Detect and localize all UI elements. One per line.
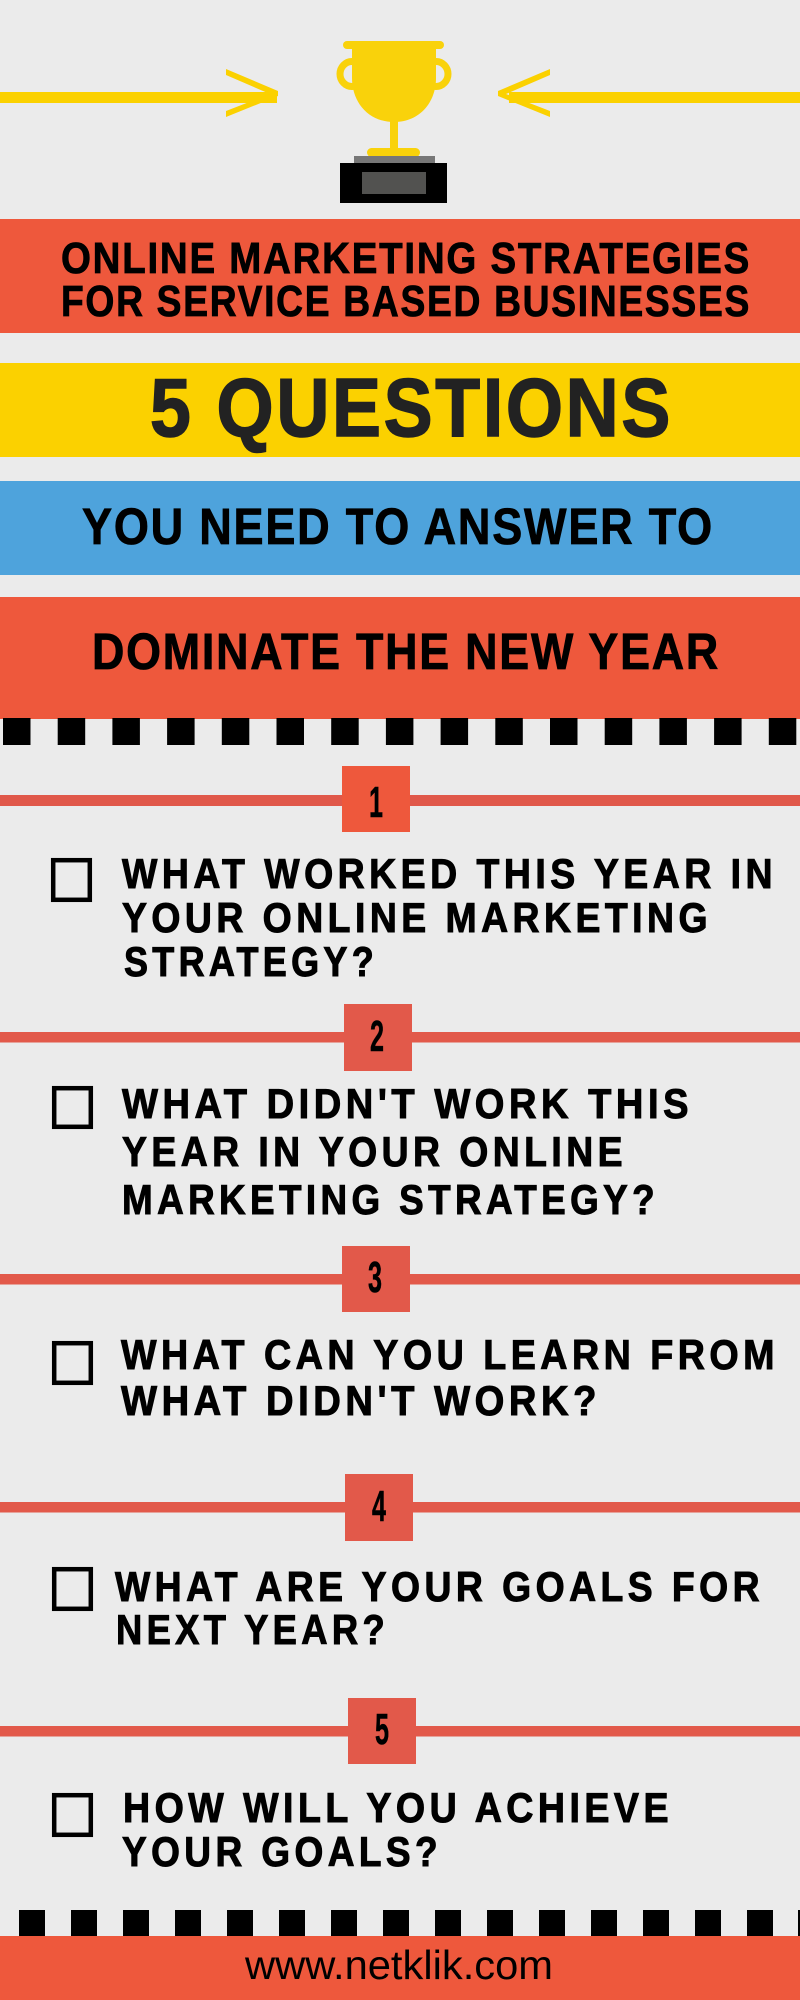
checkbox 1 <box>53 860 90 900</box>
question 3 text: WHAT DIDN'T WORK? <box>121 1377 601 1424</box>
question 1 <box>0 766 800 985</box>
checkbox 4 <box>54 1569 91 1609</box>
number badge 2 <box>344 1004 412 1071</box>
number badge 1: 1 <box>369 778 383 827</box>
question 4 text <box>115 1563 764 1653</box>
question 5 text: HOW WILL YOU ACHIEVE <box>123 1784 673 1831</box>
footer: website <box>0 1936 800 2000</box>
number badge 5: 5 <box>375 1705 389 1754</box>
divider: top checker strip <box>3 718 796 745</box>
banner: dominate the new year <box>0 597 800 719</box>
checkbox 2 <box>54 1088 91 1127</box>
question 2 text: YEAR IN YOUR ONLINE <box>122 1128 627 1175</box>
banner: online marketing strategies <box>0 219 800 333</box>
number badge 2: 2 <box>370 1012 384 1061</box>
icon: trophy <box>340 41 448 203</box>
number badge 4: 4 <box>372 1482 386 1531</box>
question 1 text: STRATEGY? <box>124 938 378 985</box>
number badge 1 <box>342 766 410 832</box>
checkbox 5 <box>54 1795 91 1835</box>
question 4 text: NEXT YEAR? <box>116 1606 389 1653</box>
arrow: right, pointing to trophy <box>498 69 800 117</box>
question 5 text <box>122 1784 673 1875</box>
question 5 text: YOUR GOALS? <box>122 1828 442 1875</box>
divider: bottom checker strip <box>19 1910 800 1936</box>
number badge 3 <box>342 1246 410 1312</box>
question 3 text <box>121 1331 779 1424</box>
banner: you need to answer to: YOU NEED TO ANSWER TO <box>82 498 714 555</box>
question 2 text: WHAT DIDN'T WORK THIS <box>122 1080 693 1127</box>
banner: dominate the new year: DOMINATE THE NEW YEAR <box>92 623 720 680</box>
arrow: left, pointing to trophy <box>0 69 278 117</box>
number badge 4 <box>345 1474 413 1541</box>
question 4 <box>0 1474 800 1653</box>
question 2 text <box>122 1080 693 1223</box>
question 3 <box>0 1246 800 1424</box>
banner: 5 questions: 5 QUESTIONS <box>150 361 673 454</box>
question 5 <box>0 1698 800 1875</box>
question 2 text: MARKETING STRATEGY? <box>122 1176 659 1223</box>
checkbox 3 <box>54 1343 91 1383</box>
number badge 5 <box>348 1698 416 1764</box>
footer: website: www.netklik.com <box>244 1942 553 1988</box>
question 2 <box>0 1004 800 1223</box>
number badge 3: 3 <box>368 1253 382 1302</box>
banner: you need to answer to <box>0 481 800 575</box>
question 1 text: YOUR ONLINE MARKETING <box>122 894 712 941</box>
question 1 text <box>122 850 777 985</box>
